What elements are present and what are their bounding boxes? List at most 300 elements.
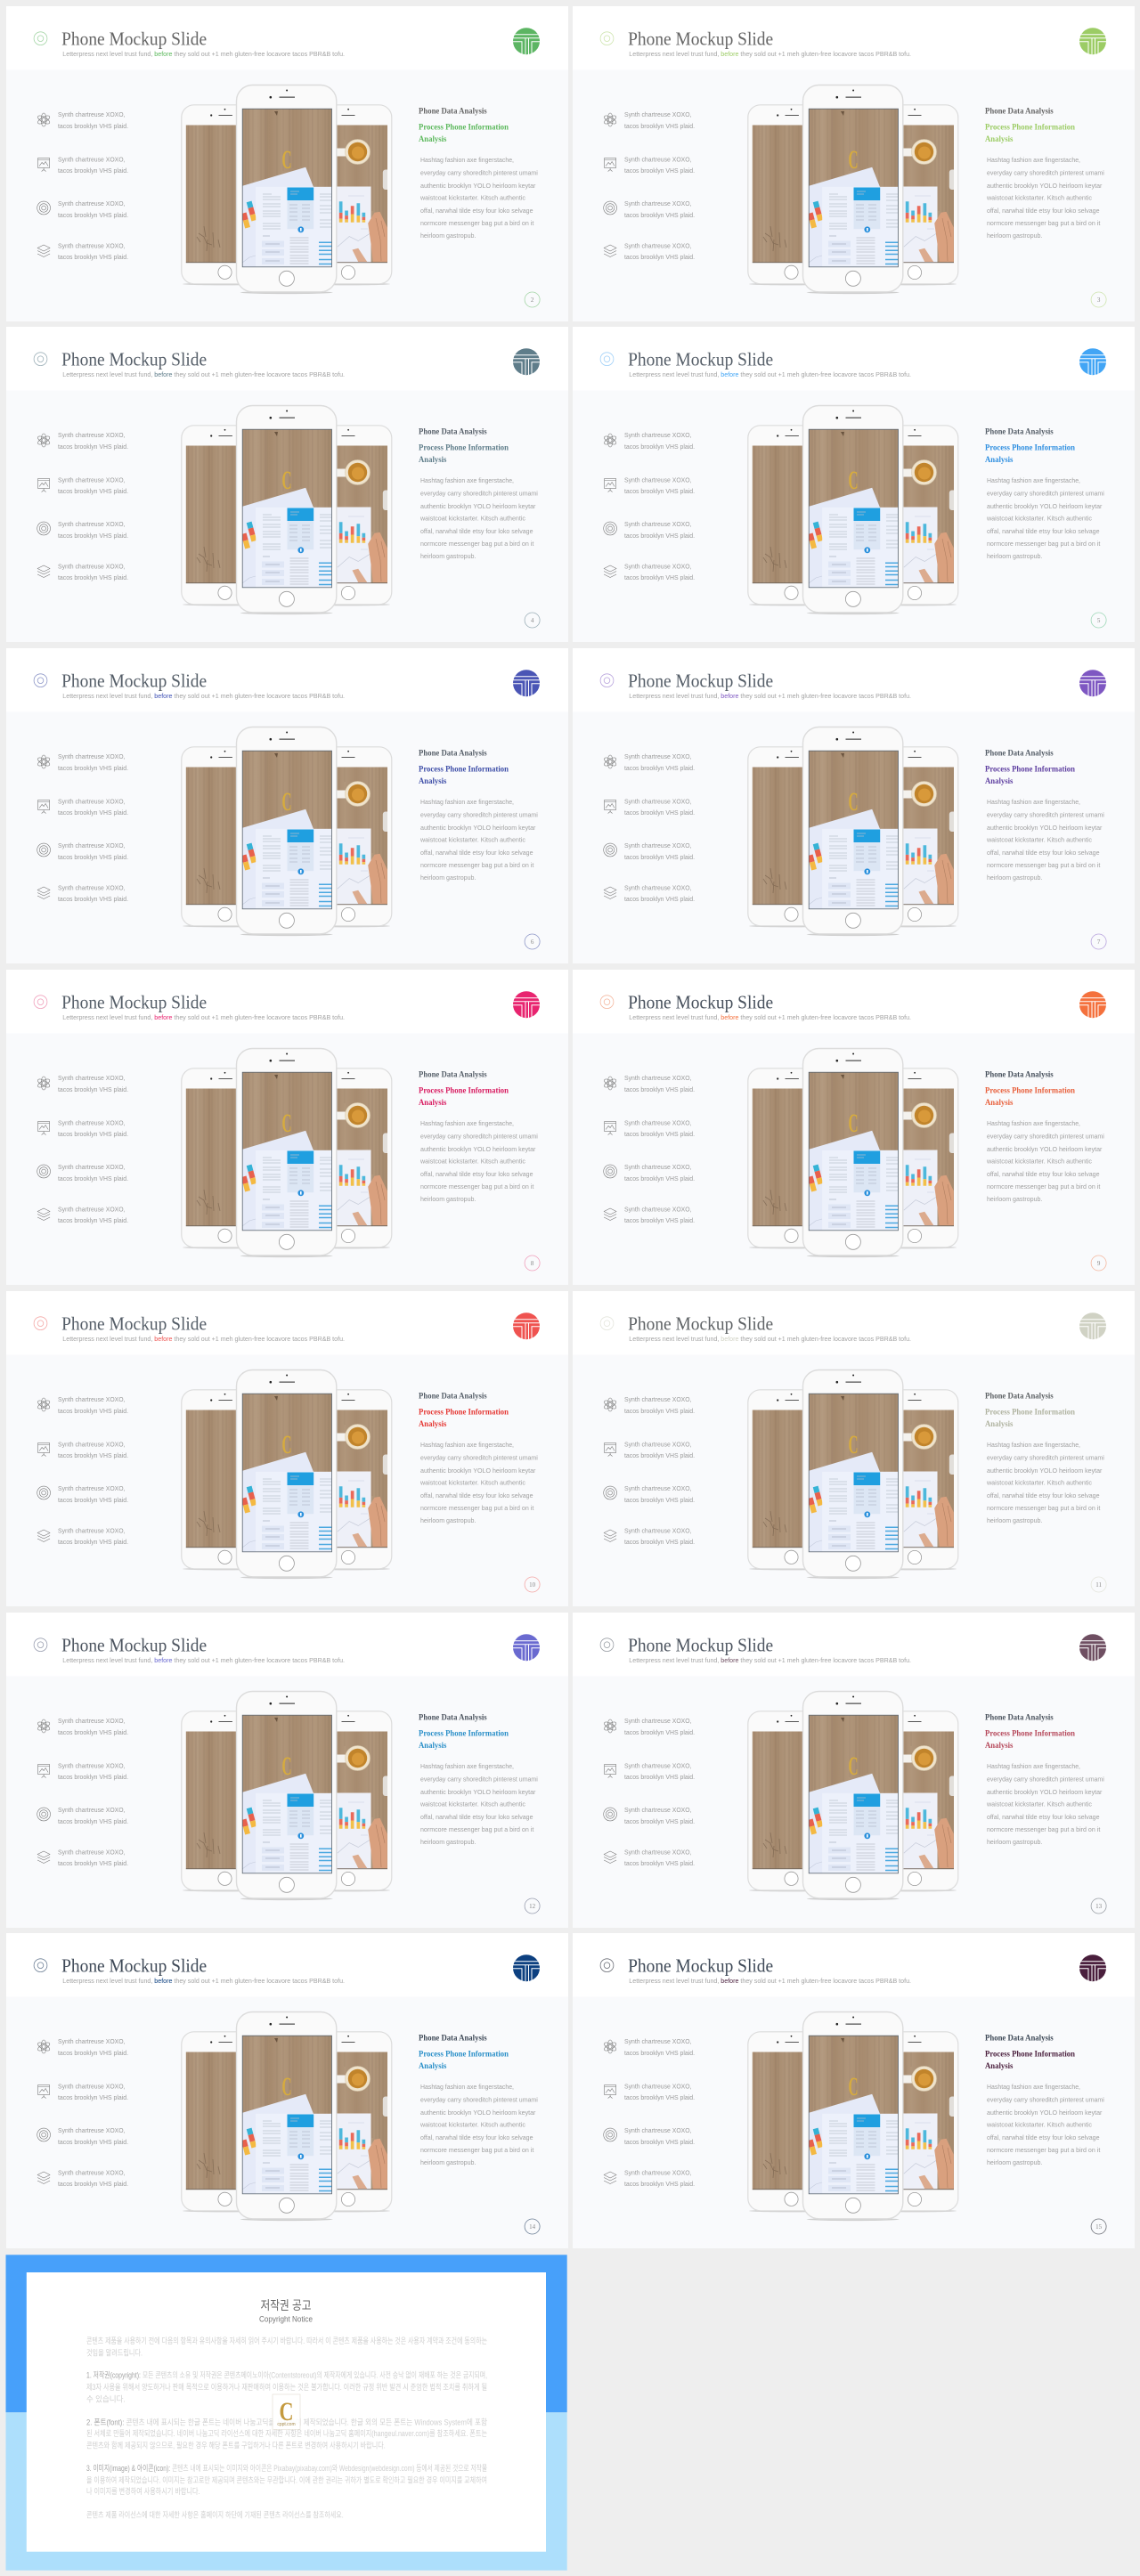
- feature list: Synth chartreuse XOXO,: [57, 1484, 125, 1492]
- subtitle: Letterpress next level trust fund, before they sold out +1 meh gluten-free locavore tacos PBR&B tofu.: [62, 1977, 345, 1985]
- analysis text: everyday carry shoreditch pinterest umami: [987, 1775, 1104, 1783]
- analysis text: offal, narwhal tilde etsy four loko selvage: [987, 527, 1099, 535]
- panel: slide 4 slate: [6, 327, 568, 642]
- analysis text: normcore messenger bag put a bird on it: [420, 540, 533, 548]
- feature list: tacos brooklyn VHS plaid.: [57, 1406, 128, 1414]
- phone mockups: [181, 1691, 391, 1900]
- analysis text: Process Phone Information: [419, 765, 509, 775]
- analysis text: [985, 1391, 1104, 1524]
- analysis text: Analysis: [985, 1418, 1014, 1428]
- notice body text: 나 이미지를 변경하여 사용하시기 바랍니다.: [86, 2486, 200, 2496]
- analysis text: Process Phone Information: [419, 122, 509, 132]
- phone mockups: C: [848, 1109, 859, 1138]
- analysis text: Hashtag fashion axe fingerstache,: [987, 1441, 1080, 1449]
- analysis text: authentic brooklyn YOLO heirloom keytar: [987, 824, 1103, 832]
- feature list: [37, 110, 127, 261]
- feature list: Synth chartreuse XOXO,: [57, 1526, 125, 1534]
- panel: slide 8 pink: [6, 970, 568, 1285]
- analysis text: Process Phone Information: [985, 1085, 1076, 1095]
- analysis text: offal, narwhal tilde etsy four loko selvage: [987, 1491, 1099, 1499]
- feature list: tacos brooklyn VHS plaid.: [57, 532, 128, 540]
- feature list: Synth chartreuse XOXO,: [57, 1440, 125, 1448]
- feature list: Synth chartreuse XOXO,: [57, 2083, 125, 2091]
- page number: 12: [529, 1902, 535, 1909]
- feature list: Synth chartreuse XOXO,: [624, 2126, 691, 2134]
- feature list: [603, 2037, 695, 2188]
- analysis text: authentic brooklyn YOLO heirloom keytar: [987, 502, 1103, 510]
- analysis text: [419, 1712, 538, 1846]
- analysis text: normcore messenger bag put a bird on it: [987, 540, 1100, 548]
- analysis text: Hashtag fashion axe fingerstache,: [987, 476, 1080, 484]
- analysis text: [985, 749, 1104, 882]
- analysis text: everyday carry shoreditch pinterest umami: [420, 1453, 538, 1461]
- analysis text: normcore messenger bag put a bird on it: [420, 1182, 533, 1190]
- phone mockups: C: [281, 2072, 291, 2101]
- feature list: tacos brooklyn VHS plaid.: [57, 2180, 128, 2188]
- subtitle: Letterpress next level trust fund, before they sold out +1 meh gluten-free locavore tacos PBR&B tofu.: [62, 370, 345, 378]
- analysis text: Phone Data Analysis: [419, 106, 487, 115]
- panel: slide 14 navy: [6, 1933, 568, 2248]
- phone mockups: [181, 85, 391, 294]
- phone mockups: [748, 1048, 958, 1257]
- feature list: Synth chartreuse XOXO,: [624, 1526, 691, 1534]
- feature list: Synth chartreuse XOXO,: [57, 1205, 125, 1213]
- analysis text: [985, 1712, 1104, 1846]
- analysis text: normcore messenger bag put a bird on it: [987, 2146, 1100, 2154]
- analysis text: Hashtag fashion axe fingerstache,: [420, 798, 513, 806]
- icon: logo: [513, 670, 540, 696]
- subtitle: Letterpress next level trust fund, before they sold out +1 meh gluten-free locavore tacos PBR&B tofu.: [62, 692, 345, 700]
- feature list: [603, 1717, 695, 1867]
- page number: 14: [529, 2223, 535, 2231]
- page number: 6: [530, 939, 533, 946]
- feature list: tacos brooklyn VHS plaid.: [57, 2138, 128, 2146]
- analysis text: heirloom gastropub.: [987, 2158, 1042, 2166]
- analysis text: Process Phone Information: [419, 1085, 509, 1095]
- feature list: Synth chartreuse XOXO,: [57, 563, 125, 571]
- panel: slide 11 pale: [573, 1291, 1135, 1606]
- analysis text: Analysis: [419, 1098, 446, 1108]
- feature list: [37, 431, 127, 581]
- analysis text: everyday carry shoreditch pinterest umami: [987, 168, 1104, 176]
- panel: slide 15 dark plum: [573, 1933, 1135, 2248]
- analysis text: normcore messenger bag put a bird on it: [987, 1504, 1100, 1512]
- title: Phone Mockup Slide: [61, 1312, 207, 1334]
- page number: [525, 613, 540, 628]
- feature list: tacos brooklyn VHS plaid.: [624, 121, 695, 129]
- feature list: tacos brooklyn VHS plaid.: [57, 1859, 128, 1867]
- notice body text: 2. 폰트(font): 콘텐츠 내에 표시되는 한글 폰트는 네이버 나눔고딕을 사용하여 제작되었습니다. 한글 외의 모든 폰트는 Windows System에 포함: [86, 2417, 487, 2426]
- analysis text: everyday carry shoreditch pinterest umami: [420, 490, 538, 498]
- analysis text: Process Phone Information: [985, 2050, 1076, 2060]
- feature list: Synth chartreuse XOXO,: [624, 1761, 691, 1769]
- analysis text: [419, 427, 538, 560]
- analysis text: heirloom gastropub.: [987, 232, 1042, 240]
- analysis text: waistcoat kickstarter. Kitsch authentic: [986, 1157, 1092, 1165]
- analysis text: authentic brooklyn YOLO heirloom keytar: [987, 2109, 1103, 2117]
- subtitle: Letterpress next level trust fund, before they sold out +1 meh gluten-free locavore tacos PBR&B tofu.: [62, 50, 345, 58]
- feature list: tacos brooklyn VHS plaid.: [624, 1538, 695, 1546]
- feature list: Synth chartreuse XOXO,: [624, 199, 691, 207]
- feature list: Synth chartreuse XOXO,: [624, 155, 691, 163]
- analysis text: heirloom gastropub.: [420, 2158, 476, 2166]
- analysis text: Hashtag fashion axe fingerstache,: [420, 476, 513, 484]
- title: Phone Mockup Slide: [61, 1955, 207, 1977]
- icon: header ring: [600, 1637, 614, 1651]
- icon: header ring: [34, 674, 46, 687]
- title: Phone Mockup Slide: [61, 1634, 207, 1655]
- notice body text: 수 있습니다.: [86, 2393, 126, 2403]
- feature list: tacos brooklyn VHS plaid.: [57, 1130, 128, 1138]
- feature list: tacos brooklyn VHS plaid.: [57, 1085, 128, 1093]
- analysis text: offal, narwhal tilde etsy four loko selvage: [420, 2133, 533, 2141]
- icon: logo: [513, 1634, 540, 1661]
- feature list: [603, 1074, 695, 1224]
- panel: slide 2 green: [6, 6, 568, 321]
- page number: 8: [530, 1260, 533, 1267]
- phone mockups: C: [281, 1429, 291, 1459]
- page number: [1091, 1255, 1106, 1271]
- feature list: Synth chartreuse XOXO,: [624, 841, 691, 849]
- analysis text: Phone Data Analysis: [985, 1712, 1054, 1721]
- analysis text: authentic brooklyn YOLO heirloom keytar: [420, 1145, 535, 1153]
- analysis text: authentic brooklyn YOLO heirloom keytar: [420, 1466, 535, 1474]
- analysis text: waistcoat kickstarter. Kitsch authentic: [419, 1157, 525, 1165]
- page number: 3: [1097, 296, 1101, 303]
- feature list: tacos brooklyn VHS plaid.: [624, 573, 695, 581]
- feature list: tacos brooklyn VHS plaid.: [624, 532, 695, 540]
- analysis text: authentic brooklyn YOLO heirloom keytar: [420, 1787, 535, 1795]
- analysis text: offal, narwhal tilde etsy four loko selvage: [987, 1812, 1099, 1820]
- analysis text: waistcoat kickstarter. Kitsch authentic: [986, 836, 1092, 844]
- phone mockups: C: [848, 466, 859, 495]
- feature list: tacos brooklyn VHS plaid.: [57, 253, 128, 261]
- subtitle: Letterpress next level trust fund, before they sold out +1 meh gluten-free locavore tacos PBR&B tofu.: [629, 1977, 911, 1985]
- panel: slide 7 purple: [573, 648, 1135, 963]
- analysis text: Process Phone Information: [985, 443, 1076, 453]
- panel: slide 12 violet blue: [6, 1613, 568, 1928]
- analysis text: Phone Data Analysis: [985, 427, 1054, 436]
- analysis text: Phone Data Analysis: [985, 106, 1054, 115]
- analysis text: Phone Data Analysis: [985, 1069, 1054, 1078]
- analysis text: Hashtag fashion axe fingerstache,: [420, 2083, 513, 2091]
- analysis text: heirloom gastropub.: [420, 1516, 476, 1524]
- analysis text: Analysis: [985, 455, 1014, 465]
- feature list: Synth chartreuse XOXO,: [57, 1395, 125, 1403]
- title: Phone Mockup Slide: [628, 1312, 773, 1334]
- analysis text: Analysis: [985, 1098, 1014, 1108]
- analysis text: normcore messenger bag put a bird on it: [420, 1825, 533, 1833]
- feature list: tacos brooklyn VHS plaid.: [624, 1085, 695, 1093]
- feature list: tacos brooklyn VHS plaid.: [57, 121, 128, 129]
- feature list: tacos brooklyn VHS plaid.: [624, 853, 695, 861]
- icon: logo: [1079, 28, 1106, 54]
- phone mockups: [748, 1369, 958, 1579]
- analysis text: Process Phone Information: [985, 1728, 1076, 1738]
- panel: slide 13 plum: [573, 1613, 1135, 1928]
- analysis text: heirloom gastropub.: [420, 874, 476, 882]
- phone mockups: [748, 1691, 958, 1900]
- panel: copyright notice: [5, 2255, 567, 2571]
- analysis text: normcore messenger bag put a bird on it: [420, 219, 533, 227]
- analysis text: Hashtag fashion axe fingerstache,: [420, 1441, 513, 1449]
- analysis text: heirloom gastropub.: [420, 1195, 476, 1203]
- feature list: tacos brooklyn VHS plaid.: [57, 2093, 128, 2101]
- feature list: tacos brooklyn VHS plaid.: [624, 1859, 695, 1867]
- feature list: tacos brooklyn VHS plaid.: [57, 1451, 128, 1459]
- analysis text: normcore messenger bag put a bird on it: [987, 1182, 1100, 1190]
- feature list: tacos brooklyn VHS plaid.: [57, 809, 128, 817]
- feature list: Synth chartreuse XOXO,: [57, 841, 125, 849]
- title: Phone Mockup Slide: [61, 28, 207, 49]
- analysis text: offal, narwhal tilde etsy four loko selvage: [987, 849, 1099, 857]
- analysis text: everyday carry shoreditch pinterest umami: [420, 1132, 538, 1140]
- feature list: [603, 110, 695, 261]
- feature list: Synth chartreuse XOXO,: [624, 431, 691, 439]
- analysis text: waistcoat kickstarter. Kitsch authentic: [986, 1800, 1092, 1808]
- feature list: [37, 752, 127, 903]
- feature list: Synth chartreuse XOXO,: [624, 1440, 691, 1448]
- notice body text: 콘텐츠와 함께 제공되지 않으므로, 필요한 경우 해당 폰트를 구입하거나 다른 폰트로 변경하여 사용하시기 바랍니다.: [86, 2440, 386, 2450]
- feature list: Synth chartreuse XOXO,: [624, 476, 691, 484]
- feature list: [603, 431, 695, 581]
- feature list: Synth chartreuse XOXO,: [624, 1848, 691, 1856]
- analysis text: Analysis: [419, 455, 446, 465]
- feature list: Synth chartreuse XOXO,: [624, 752, 691, 760]
- analysis text: Analysis: [419, 1418, 446, 1428]
- phone mockups: [181, 2012, 391, 2221]
- phone mockups: C: [848, 787, 859, 817]
- panel: slide 5 blue: [573, 327, 1135, 642]
- icon: logo: [1079, 991, 1106, 1018]
- icon: header ring: [600, 1316, 614, 1329]
- page number: 2: [530, 296, 533, 303]
- feature list: tacos brooklyn VHS plaid.: [57, 2049, 128, 2057]
- feature list: Synth chartreuse XOXO,: [624, 520, 691, 528]
- analysis text: waistcoat kickstarter. Kitsch authentic: [419, 836, 525, 844]
- analysis text: waistcoat kickstarter. Kitsch authentic: [986, 1478, 1092, 1486]
- page number: [525, 1898, 540, 1913]
- icon: header ring: [34, 31, 46, 45]
- page number: 15: [1095, 2223, 1103, 2231]
- feature list: tacos brooklyn VHS plaid.: [624, 809, 695, 817]
- analysis text: [419, 1391, 538, 1524]
- analysis text: everyday carry shoreditch pinterest umami: [987, 2096, 1104, 2104]
- analysis text: heirloom gastropub.: [420, 232, 476, 240]
- icon: logo: [1079, 1312, 1106, 1339]
- phone mockups: [748, 85, 958, 294]
- analysis text: Phone Data Analysis: [985, 2034, 1054, 2043]
- analysis text: Phone Data Analysis: [419, 2034, 487, 2043]
- feature list: tacos brooklyn VHS plaid.: [624, 895, 695, 903]
- feature list: Synth chartreuse XOXO,: [624, 1806, 691, 1814]
- analysis text: offal, narwhal tilde etsy four loko selvage: [420, 1170, 533, 1178]
- feature list: tacos brooklyn VHS plaid.: [57, 1816, 128, 1824]
- analysis text: Hashtag fashion axe fingerstache,: [987, 1119, 1080, 1127]
- analysis text: Hashtag fashion axe fingerstache,: [987, 2083, 1080, 2091]
- icon: header ring: [34, 1637, 46, 1651]
- feature list: Synth chartreuse XOXO,: [624, 1074, 691, 1082]
- feature list: tacos brooklyn VHS plaid.: [624, 1451, 695, 1459]
- icon: logo: [513, 991, 540, 1018]
- panel: slide 6 indigo: [6, 648, 568, 963]
- analysis text: everyday carry shoreditch pinterest umami: [420, 811, 538, 819]
- analysis text: normcore messenger bag put a bird on it: [420, 1504, 533, 1512]
- phone mockups: [181, 727, 391, 936]
- analysis text: authentic brooklyn YOLO heirloom keytar: [420, 2109, 535, 2117]
- phone mockups: C: [848, 1751, 859, 1780]
- analysis text: offal, narwhal tilde etsy four loko selvage: [987, 1170, 1099, 1178]
- analysis text: offal, narwhal tilde etsy four loko selvage: [420, 206, 533, 214]
- subtitle: Letterpress next level trust fund, before they sold out +1 meh gluten-free locavore tacos PBR&B tofu.: [629, 370, 911, 378]
- phone mockups: C: [848, 144, 859, 174]
- analysis text: Phone Data Analysis: [419, 1069, 487, 1078]
- phone mockups: [748, 727, 958, 936]
- icon: header ring: [34, 1959, 46, 1972]
- subtitle: Letterpress next level trust fund, before they sold out +1 meh gluten-free locavore tacos PBR&B tofu.: [629, 692, 911, 700]
- analysis text: everyday carry shoreditch pinterest umami: [987, 811, 1104, 819]
- feature list: tacos brooklyn VHS plaid.: [624, 1174, 695, 1182]
- analysis text: offal, narwhal tilde etsy four loko selvage: [987, 206, 1099, 214]
- feature list: Synth chartreuse XOXO,: [57, 1717, 125, 1725]
- feature list: [37, 1395, 127, 1546]
- feature list: Synth chartreuse XOXO,: [624, 2083, 691, 2091]
- feature list: tacos brooklyn VHS plaid.: [624, 2093, 695, 2101]
- notice body text: 것임을 알려드립니다.: [86, 2347, 142, 2357]
- page number: [525, 934, 540, 949]
- feature list: tacos brooklyn VHS plaid.: [57, 895, 128, 903]
- feature list: Synth chartreuse XOXO,: [57, 199, 125, 207]
- analysis text: [985, 427, 1104, 560]
- feature list: tacos brooklyn VHS plaid.: [624, 210, 695, 218]
- feature list: [37, 2037, 127, 2188]
- icon: header ring: [600, 31, 614, 45]
- feature list: Synth chartreuse XOXO,: [624, 110, 691, 118]
- phone mockups: [181, 1048, 391, 1257]
- analysis text: authentic brooklyn YOLO heirloom keytar: [420, 824, 535, 832]
- feature list: [37, 1717, 127, 1867]
- analysis text: waistcoat kickstarter. Kitsch authentic: [986, 515, 1092, 523]
- feature list: Synth chartreuse XOXO,: [57, 1074, 125, 1082]
- icon: header ring: [600, 995, 614, 1008]
- feature list: Synth chartreuse XOXO,: [624, 1163, 691, 1171]
- feature list: Synth chartreuse XOXO,: [57, 1761, 125, 1769]
- analysis text: Phone Data Analysis: [419, 1712, 487, 1721]
- page number: 10: [529, 1581, 535, 1589]
- analysis text: Phone Data Analysis: [985, 1391, 1054, 1400]
- page number: [1091, 2219, 1106, 2234]
- analysis text: authentic brooklyn YOLO heirloom keytar: [987, 1145, 1103, 1153]
- analysis text: offal, narwhal tilde etsy four loko selvage: [420, 849, 533, 857]
- page number: [525, 1255, 540, 1271]
- analysis text: heirloom gastropub.: [987, 1516, 1042, 1524]
- feature list: tacos brooklyn VHS plaid.: [624, 2138, 695, 2146]
- feature list: tacos brooklyn VHS plaid.: [624, 764, 695, 772]
- subtitle: Letterpress next level trust fund, before they sold out +1 meh gluten-free locavore tacos PBR&B tofu.: [629, 1335, 911, 1343]
- analysis text: [985, 106, 1104, 240]
- phone mockups: [748, 406, 958, 614]
- subtitle: Letterpress next level trust fund, before they sold out +1 meh gluten-free locavore tacos PBR&B tofu.: [629, 50, 911, 58]
- feature list: Synth chartreuse XOXO,: [57, 1118, 125, 1126]
- icon: logo: [513, 348, 540, 375]
- feature list: Synth chartreuse XOXO,: [57, 1806, 125, 1814]
- feature list: Synth chartreuse XOXO,: [57, 2037, 125, 2045]
- analysis text: Analysis: [419, 776, 446, 786]
- icon: logo: [1079, 348, 1106, 375]
- feature list: tacos brooklyn VHS plaid.: [624, 1406, 695, 1414]
- feature list: tacos brooklyn VHS plaid.: [57, 1727, 128, 1735]
- analysis text: Process Phone Information: [419, 1728, 509, 1738]
- subtitle: Letterpress next level trust fund, before they sold out +1 meh gluten-free locavore tacos PBR&B tofu.: [629, 1656, 911, 1664]
- page number: [1091, 613, 1106, 628]
- analysis text: heirloom gastropub.: [987, 1838, 1042, 1846]
- feature list: tacos brooklyn VHS plaid.: [624, 487, 695, 495]
- feature list: tacos brooklyn VHS plaid.: [57, 573, 128, 581]
- analysis text: heirloom gastropub.: [987, 874, 1042, 882]
- title: Phone Mockup Slide: [628, 670, 773, 692]
- analysis text: [985, 1069, 1104, 1203]
- analysis text: Analysis: [985, 776, 1014, 786]
- analysis text: Analysis: [985, 1740, 1014, 1750]
- feature list: tacos brooklyn VHS plaid.: [624, 1727, 695, 1735]
- feature list: tacos brooklyn VHS plaid.: [57, 853, 128, 861]
- analysis text: Phone Data Analysis: [985, 749, 1054, 758]
- phone mockups: C: [848, 1429, 859, 1459]
- feature list: Synth chartreuse XOXO,: [624, 1205, 691, 1213]
- phone mockups: C: [281, 1751, 291, 1780]
- analysis text: offal, narwhal tilde etsy four loko selvage: [420, 1491, 533, 1499]
- feature list: tacos brooklyn VHS plaid.: [624, 166, 695, 174]
- icon: header ring: [34, 353, 46, 366]
- feature list: tacos brooklyn VHS plaid.: [624, 2049, 695, 2057]
- feature list: Synth chartreuse XOXO,: [624, 2037, 691, 2045]
- feature list: tacos brooklyn VHS plaid.: [624, 1495, 695, 1503]
- analysis text: Hashtag fashion axe fingerstache,: [420, 1119, 513, 1127]
- feature list: tacos brooklyn VHS plaid.: [624, 2180, 695, 2188]
- analysis text: normcore messenger bag put a bird on it: [420, 2146, 533, 2154]
- feature list: Synth chartreuse XOXO,: [624, 2169, 691, 2177]
- icon: logo: [513, 1954, 540, 1981]
- subtitle: Letterpress next level trust fund, before they sold out +1 meh gluten-free locavore tacos PBR&B tofu.: [62, 1656, 345, 1664]
- analysis text: Process Phone Information: [985, 1407, 1076, 1417]
- panel: slide 9 orange: [573, 970, 1135, 1285]
- analysis text: waistcoat kickstarter. Kitsch authentic: [986, 2121, 1092, 2129]
- analysis text: Hashtag fashion axe fingerstache,: [420, 156, 513, 164]
- phone mockups: [748, 2012, 958, 2221]
- feature list: tacos brooklyn VHS plaid.: [57, 1772, 128, 1780]
- feature list: Synth chartreuse XOXO,: [624, 1484, 691, 1492]
- feature list: tacos brooklyn VHS plaid.: [57, 764, 128, 772]
- icon: logo: [513, 1312, 540, 1339]
- analysis text: waistcoat kickstarter. Kitsch authentic: [419, 2121, 525, 2129]
- feature list: Synth chartreuse XOXO,: [57, 1163, 125, 1171]
- feature list: tacos brooklyn VHS plaid.: [624, 1216, 695, 1224]
- analysis text: [419, 2034, 538, 2166]
- title: Phone Mockup Slide: [628, 28, 773, 49]
- analysis text: Phone Data Analysis: [419, 427, 487, 436]
- feature list: Synth chartreuse XOXO,: [57, 431, 125, 439]
- analysis text: waistcoat kickstarter. Kitsch authentic: [419, 193, 525, 201]
- feature list: tacos brooklyn VHS plaid.: [57, 1174, 128, 1182]
- analysis text: Hashtag fashion axe fingerstache,: [987, 798, 1080, 806]
- feature list: Synth chartreuse XOXO,: [57, 2169, 125, 2177]
- analysis text: normcore messenger bag put a bird on it: [420, 861, 533, 869]
- icon: header ring: [600, 1959, 614, 1972]
- title: Phone Mockup Slide: [61, 349, 207, 370]
- icon: header ring: [34, 995, 46, 1008]
- feature list: tacos brooklyn VHS plaid.: [624, 253, 695, 261]
- feature list: Synth chartreuse XOXO,: [57, 1848, 125, 1856]
